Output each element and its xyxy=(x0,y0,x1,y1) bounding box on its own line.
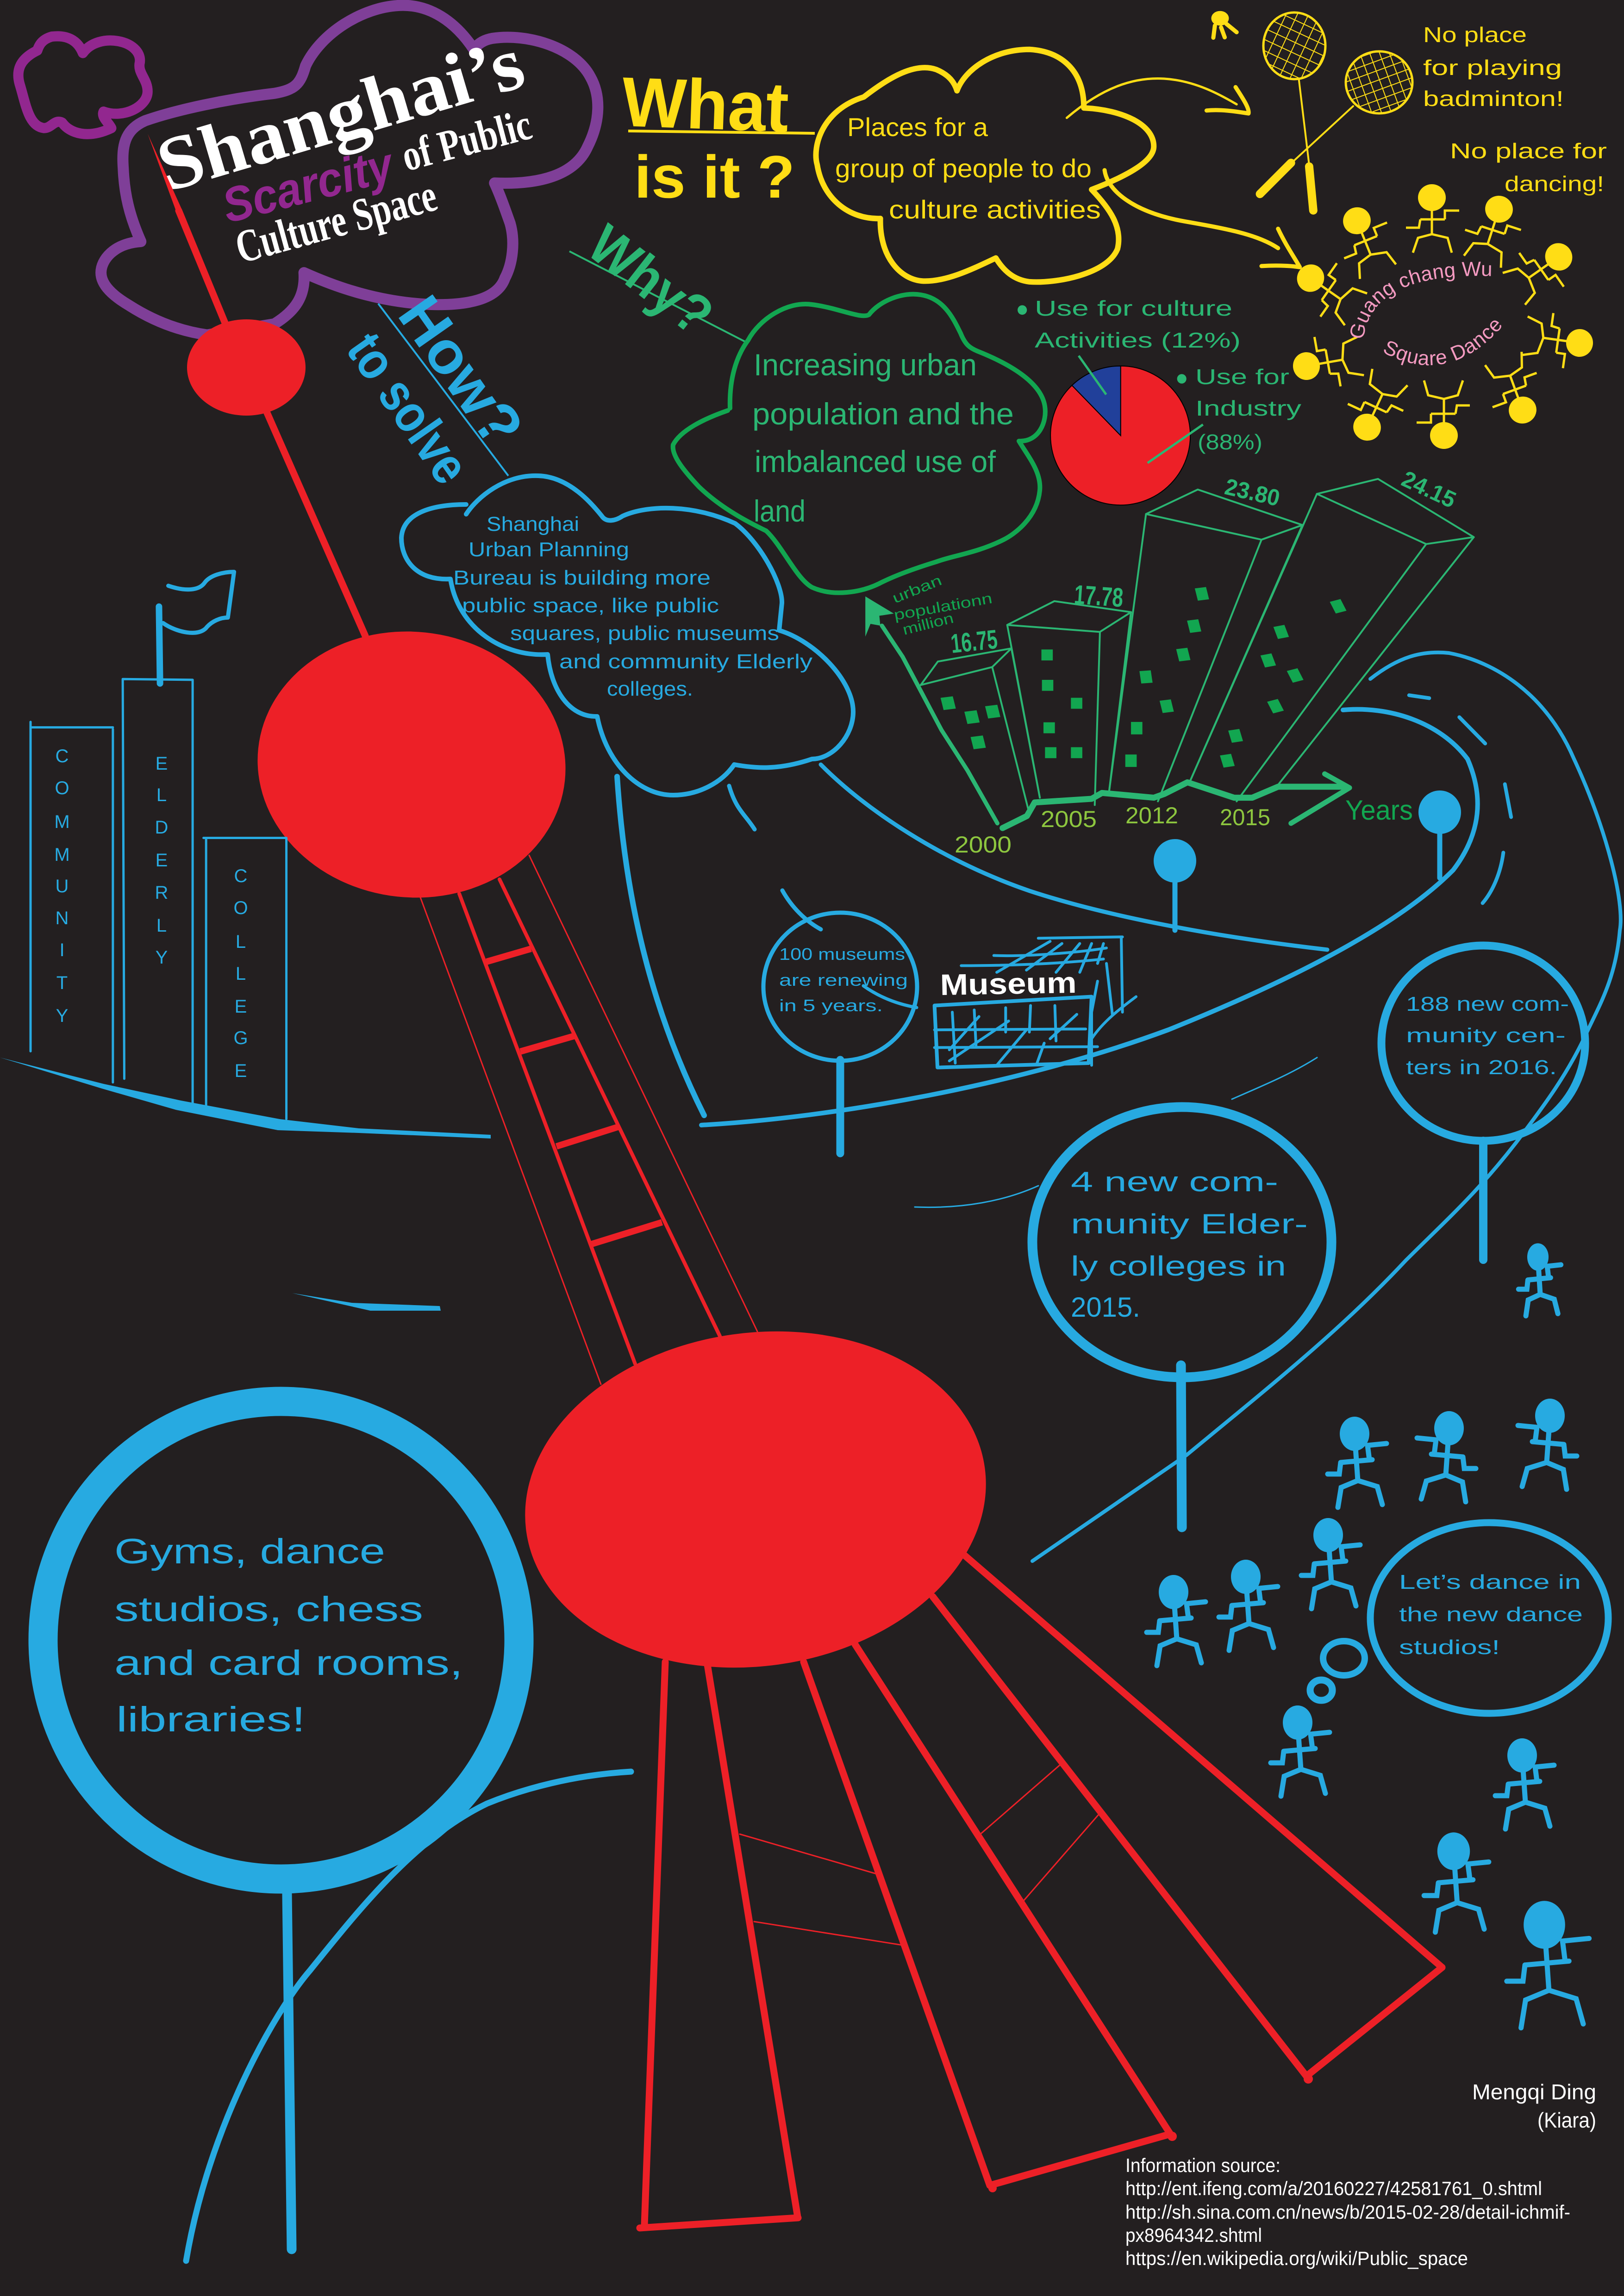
axis: horizontal arrow xyxy=(1003,782,1346,828)
label: Square Dance: Square Dance xyxy=(1380,313,1507,370)
panel: how to solve cloud: public space, like public xyxy=(462,594,719,617)
panel: why cloud: land xyxy=(754,494,806,528)
panel: how to solve cloud: Shanghai xyxy=(487,513,579,535)
title line: of Public: of Public xyxy=(396,100,537,180)
panel: how to solve cloud: colleges. xyxy=(607,678,693,700)
pie slice: culture activities xyxy=(1072,366,1121,436)
panel: how to solve cloud: Bureau is building more xyxy=(453,566,711,589)
text: no place for badminton: badminton! xyxy=(1423,87,1564,111)
panel: how to solve cloud xyxy=(401,476,853,795)
callout: let's dance speech bubble: studios! xyxy=(1399,1636,1500,1659)
value labels: 16.75 xyxy=(949,624,999,659)
callout: 100 museums xyxy=(763,913,917,1153)
chart: urban population buildings: populationn xyxy=(893,590,993,623)
callout: 4 new community elderly colleges: 2015. xyxy=(1071,1292,1140,1323)
callout: gyms, dance studios: Gyms, dance xyxy=(114,1532,385,1571)
information sources: https://en.wikipedia.org/wiki/Public_space xyxy=(1125,2247,1468,2269)
text: no place for dancing: dancing! xyxy=(1505,172,1604,196)
label: elderly: ELDERLY xyxy=(155,753,168,968)
title line: Culture Space: Culture Space xyxy=(230,169,442,273)
heading: How to solve?: How? xyxy=(386,283,537,459)
callout: 4 new community elderly colleges: ly colleges in xyxy=(1071,1251,1286,1282)
panel: what it is cloud: culture activities xyxy=(889,195,1101,224)
panel: why cloud xyxy=(673,294,1045,593)
middle sphere xyxy=(244,616,579,913)
chart: land use pie: Use for xyxy=(1195,365,1289,389)
axis label: urban xyxy=(890,572,944,606)
information sources: http://ent.ifeng.com/a/20160227/42581761_0.shtml xyxy=(1125,2178,1542,2199)
callout: 4 new community elderly colleges: 4 new com- xyxy=(1071,1166,1278,1197)
callout: let's dance speech bubble xyxy=(1310,1523,1608,1713)
title cloud xyxy=(101,6,598,335)
author credit: Mengqi Ding xyxy=(1472,2080,1596,2104)
decorative rough stroke xyxy=(292,1293,441,1311)
information sources: Information source: xyxy=(1125,2154,1280,2176)
callout: gyms, dance studios: libraries! xyxy=(116,1700,306,1739)
panel: how to solve cloud: and community Elderly xyxy=(559,650,812,673)
icon: badminton rackets and shuttlecock xyxy=(1211,11,1412,211)
callout: 100 museums: are renewing xyxy=(779,971,908,989)
chart: land use pie: Activities (12%) xyxy=(1035,328,1241,352)
text: no place for badminton xyxy=(1423,23,1564,111)
panel: why cloud: Increasing urban xyxy=(754,348,977,382)
information sources xyxy=(1125,2154,1570,2269)
chart: urban population buildings: 17.78 xyxy=(1073,579,1124,613)
small purple cloud xyxy=(19,36,148,134)
panel: how to solve cloud: Urban Planning xyxy=(468,538,629,561)
heading: Why?: Why? xyxy=(577,213,725,347)
callout: 4 new community elderly colleges: munity Elder- xyxy=(1071,1208,1308,1239)
label: community: COMMUNITY xyxy=(54,746,70,1026)
chart: land use pie: Use for culture xyxy=(1035,296,1232,320)
chart: urban population buildings: 2015 xyxy=(1220,804,1270,830)
panel: what it is cloud xyxy=(816,50,1300,282)
building 2015 xyxy=(1190,479,1474,801)
callout: let's dance speech bubble: Let’s dance in xyxy=(1399,1571,1581,1593)
flag pole xyxy=(159,607,160,684)
callout: let's dance speech bubble: the new dance xyxy=(1399,1603,1583,1626)
arrow: to badminton xyxy=(1067,79,1237,118)
chart: land use pie xyxy=(1018,296,1301,505)
road tree 2 xyxy=(1418,790,1461,834)
label: college: COLLEGE xyxy=(233,866,248,1081)
ground stroke xyxy=(0,1058,491,1139)
panel: why cloud: population and the xyxy=(752,397,1014,431)
chart: land use pie: (88%) xyxy=(1198,430,1262,454)
callout: 100 museums: in 5 years. xyxy=(779,996,883,1015)
icon: community elderly college buildings xyxy=(0,572,491,1139)
year labels: 2000 xyxy=(955,832,1012,858)
callout: gyms, dance studios: studios, chess xyxy=(114,1590,423,1629)
chart: urban population buildings: million xyxy=(901,610,955,638)
pie slice: industry xyxy=(1050,366,1190,505)
callout: 188 new community centers: ters in 2016. xyxy=(1406,1056,1557,1079)
heading: What is it?: What xyxy=(621,62,790,147)
flag xyxy=(163,572,234,633)
building 2012 xyxy=(1109,490,1302,801)
building windows xyxy=(941,587,1347,768)
callout: gyms, dance studios: and card rooms, xyxy=(114,1643,463,1683)
tower base legs xyxy=(503,1302,1442,2228)
icon: museum: Museum xyxy=(940,966,1077,1002)
text: no place for dancing xyxy=(1450,139,1607,196)
chart: urban population buildings: 2012 xyxy=(1125,803,1178,828)
heading: How to solve? xyxy=(336,283,537,494)
chart: urban population buildings: 2005 xyxy=(1041,806,1097,832)
heading: What is it? xyxy=(621,62,815,211)
callout: 188 new community centers: 188 new com- xyxy=(1406,993,1569,1015)
building 2005 xyxy=(1007,601,1131,805)
label: Guang chang Wu: Guang chang Wu xyxy=(1345,258,1493,341)
callout: gyms, dance studios xyxy=(43,1401,631,2261)
chart: urban population buildings xyxy=(865,466,1474,858)
author credit xyxy=(1472,2080,1596,2132)
information sources: px8964342.shtml xyxy=(1125,2224,1262,2246)
title xyxy=(147,20,537,273)
chart: urban population buildings: 23.80 xyxy=(1223,473,1282,511)
lower sphere xyxy=(503,1302,1008,1697)
building 2000 xyxy=(921,648,1040,814)
arrow: to dancers xyxy=(1105,170,1300,267)
chart: urban population buildings: Years xyxy=(1345,795,1413,826)
callout: 100 museums: 100 museums xyxy=(779,945,905,964)
callout: 4 new community elderly colleges xyxy=(1032,1107,1331,1527)
title line: Shanghai's: Shanghai’s xyxy=(147,20,533,208)
text: no place for badminton: No place xyxy=(1423,23,1527,47)
information sources: http://sh.sina.com.cn/news/b/2015-02-28/detail-ichmif- xyxy=(1125,2201,1570,2223)
text: no place for dancing: No place for xyxy=(1450,139,1607,163)
icon: museum xyxy=(935,937,1136,1068)
text: no place for badminton: for playing xyxy=(1423,56,1562,80)
road network xyxy=(617,653,1621,1561)
heading: How to solve?: to solve xyxy=(336,322,481,494)
top sphere xyxy=(187,319,306,416)
heading: What is it?: is it ? xyxy=(634,143,795,211)
title line: Scarcity: Scarcity xyxy=(217,137,400,233)
icon: circle of square dancers xyxy=(1285,184,1597,450)
panel: what it is cloud: group of people to do xyxy=(835,154,1092,183)
chart: urban population buildings: 24.15 xyxy=(1398,466,1460,513)
axis: vertical arrow xyxy=(882,626,997,823)
panel: what it is cloud: Places for a xyxy=(847,112,988,142)
blue dancers xyxy=(1147,1243,1589,2028)
author credit: (Kiara) xyxy=(1537,2108,1596,2132)
tower: top spike, spheres and shaft xyxy=(148,134,757,1384)
panel: why cloud: imbalanced use of xyxy=(755,444,996,479)
panel: how to solve cloud: squares, public museums xyxy=(510,622,779,645)
callout: 188 new community centers xyxy=(1381,946,1585,1260)
callout: 188 new community centers: munity cen- xyxy=(1406,1024,1566,1047)
chart: land use pie: Industry xyxy=(1195,396,1301,420)
road tree 1 xyxy=(1154,839,1196,883)
